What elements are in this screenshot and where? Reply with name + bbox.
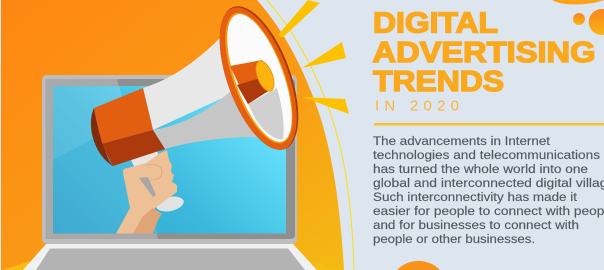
title line: advertising: ADVERTISING bbox=[372, 37, 596, 69]
laptop bbox=[23, 75, 317, 270]
megaphone bell interior bbox=[214, 6, 305, 150]
divider rule bbox=[374, 123, 604, 126]
body paragraph: The advancements in Internet bbox=[373, 134, 551, 148]
top right orange shape bbox=[552, 0, 604, 4]
megaphone horn light side bbox=[143, 36, 240, 130]
icon: yellow sound rays bbox=[278, 0, 349, 114]
decorative dots bbox=[573, 9, 604, 35]
body paragraph bbox=[373, 134, 604, 246]
body paragraph: Such interconnectivity has made it bbox=[373, 190, 578, 204]
body paragraph: global and interconnected digital village. bbox=[373, 176, 604, 190]
megaphone back cap bbox=[91, 108, 113, 166]
body paragraph: easier for people to connect with people bbox=[373, 204, 604, 218]
orange arc panel bbox=[1, 0, 344, 270]
hand holding megaphone bbox=[116, 150, 185, 234]
megaphone red band bbox=[94, 88, 153, 144]
bottom orange circle bbox=[397, 261, 440, 270]
megaphone bbox=[91, 0, 314, 166]
title line: digital: DIGITAL bbox=[373, 8, 498, 40]
title line: trends: TRENDS bbox=[373, 66, 504, 98]
body paragraph: people or other businesses. bbox=[373, 232, 535, 246]
megaphone inner tube bbox=[230, 60, 270, 104]
megaphone bell rim bbox=[204, 0, 314, 160]
body paragraph: and for businesses to connect with bbox=[373, 218, 579, 232]
megaphone horn shaded side bbox=[153, 90, 258, 149]
body paragraph: has turned the whole world into one bbox=[373, 162, 588, 176]
title bbox=[372, 8, 596, 98]
thin yellow arc line bbox=[267, 0, 354, 270]
bottom yellow corners bbox=[3, 261, 340, 270]
body paragraph: technologies and telecommunications bbox=[373, 148, 600, 162]
subtitle: IN 2020 bbox=[375, 98, 459, 114]
